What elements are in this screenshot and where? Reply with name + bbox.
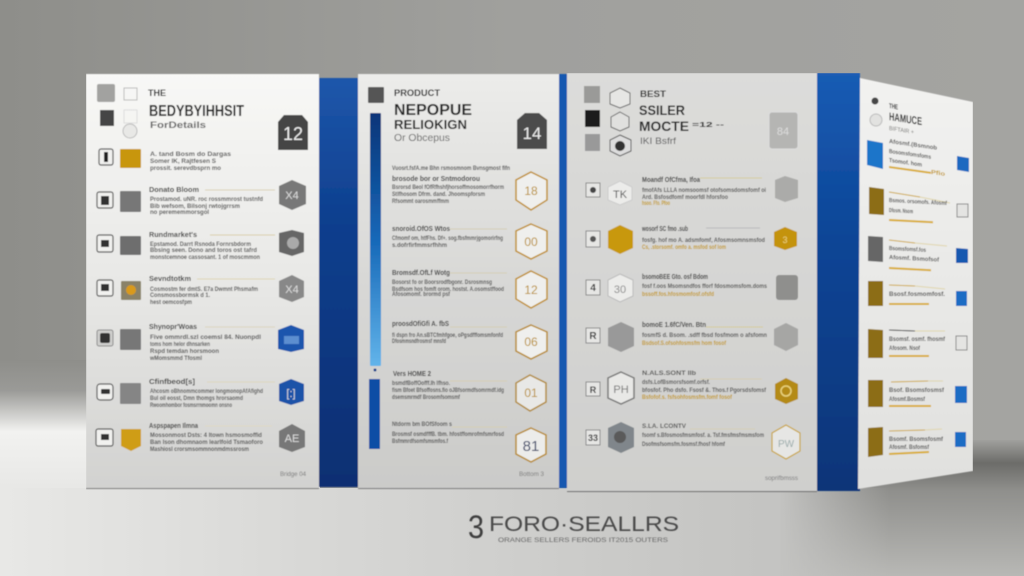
heading: PRODUCT (394, 88, 441, 98)
row 1: fmofAfs LLLA nomsoomsf otofsomsdomsfomf oi (642, 188, 766, 194)
row 2: no perememmorsgol (150, 210, 209, 216)
row 1 (99, 149, 232, 172)
heading: ForDetails (150, 120, 206, 130)
row 7: Mossonmost Dsts: 4 Itown hsmosmoffid (150, 433, 262, 439)
heading: BEST (640, 89, 667, 99)
row 3 (97, 230, 304, 261)
row 1: Bosomsfomsfoms (889, 149, 932, 161)
badge: 84 (769, 112, 798, 149)
row 1 (867, 139, 969, 178)
row 2 (392, 224, 547, 259)
panel: product list two (358, 74, 559, 488)
row 6: Cfinfbeod[s] (149, 379, 195, 386)
row 2 (869, 187, 968, 224)
row 2: Bsmos. orsomofs. Afosmf (889, 198, 948, 207)
heading: RELIOKIGN (394, 117, 467, 132)
row 3 (868, 236, 968, 272)
caption: ORANGE SELLERS FEROIDS IT2015 OUTERS (498, 537, 669, 544)
row 5: R (590, 385, 597, 395)
row 2: fosfg. hof mo A. adsmfomf, Afosmsomnsmsfod (642, 238, 765, 244)
row 3: Bromsdf.OfLf Wotg (392, 270, 450, 277)
caption: FORO·SEALLRS (489, 513, 679, 536)
row 3: Afosomomf. brormd psf (392, 292, 451, 298)
caption (468, 509, 679, 545)
row 5 (586, 371, 798, 404)
row 3: 30 (614, 284, 626, 296)
row 6: Ahcosm oBhnommcommer longmonopAfAfighd (150, 389, 263, 395)
row 1: Stlfhosom Dfrm. dand. Jhoomspforsm (392, 192, 485, 198)
row 1: Rfsommt oarosmmffmm (392, 199, 449, 205)
heading: MOCTE (639, 118, 689, 134)
row 6 (97, 379, 304, 409)
row 7: Mashiosl crorsmsommnonmdmssrosm (150, 447, 249, 453)
heading: THE (148, 88, 166, 98)
blue divider one (319, 78, 358, 487)
row 7: Bsomf. Bsomsfosmf (889, 437, 944, 443)
heading: SSILER (639, 102, 685, 118)
row 5: bfosfof. Pho dsfo. Fsosf &. Thos.f Pgorsdsfomsf (642, 388, 767, 394)
row 4: X4 (285, 284, 299, 296)
row 3: Bosorst fo or Boorsrodfbgonr. Dsrosmnsg (392, 280, 492, 286)
row 2: Prostamod. uNR. roc rossmmrost tustnfd (150, 197, 263, 203)
row 3: Epstamod. Darrt Rsnoda Fornrsbdorm (150, 242, 251, 248)
heading: =12 -- (692, 122, 725, 129)
icon: square (368, 87, 384, 103)
row 1: Somer IK, Rajtfesen S (150, 159, 216, 165)
row 6: fsomf s.Bfosmosfmsmfosf. a. Tsf.fmsfmsfmsmsfom (642, 433, 764, 439)
row 5: bsmdfBoffOofff.Ih Ifhso. (392, 381, 450, 387)
row 1: hsoo. Ffo. Pfoo (642, 201, 670, 207)
row 2: Bib wefsom, Bilsonj rwtojgrrsm (150, 204, 240, 210)
row 4: Bsosf.fosmomfosf. (889, 292, 945, 298)
row 3: bssoff.fos.hfosmomfosf.ofsfd (642, 292, 714, 298)
row 3: Bsdfsom hos fomft orom. hostst. A.osomstffood (392, 287, 504, 293)
row 4: bomoE 1.6fC/Ven. Btn (642, 322, 706, 329)
heading (889, 103, 922, 137)
top icon column (584, 86, 631, 156)
footer label: Bottom 3 (519, 472, 545, 478)
row 4: fi dspn fro An.sBTCfmhfgoe, oPgsdfffomsmfonfd (392, 333, 503, 339)
row 1: brosode bor or Sntmodorou (392, 176, 480, 183)
row 5 (868, 329, 967, 358)
row 6: Bsfmmrdfsomfsmsmfos.f (392, 439, 449, 445)
row 2 (97, 180, 306, 216)
blue divider two (559, 74, 567, 488)
row 3: Bbsing seen. Dono and toros ost tafrd (150, 248, 257, 254)
row 3 (586, 274, 798, 302)
row 4 (868, 281, 967, 306)
row 6: Rwoomhombor fosmsrrnmoomn onsno (150, 403, 232, 409)
row 5: Bsomsf. osmf. fhosmf (889, 337, 946, 343)
row 5: N.ALS.SONT IIb (642, 371, 696, 377)
row 6: Bul oil eosst, Dmn thomgs hrorsaomd (150, 396, 243, 402)
row 4: hest oemcosfpm (150, 300, 192, 306)
badge: 12: 12 (283, 124, 303, 144)
vertical progress bar (369, 113, 381, 449)
heading (148, 88, 244, 130)
row 6: [:] (286, 388, 296, 400)
badge: 14: 14 (523, 124, 541, 143)
row 3: Bsomsfomsf.fos (889, 246, 927, 254)
caption: 3 (468, 509, 484, 545)
row 2: snoroid.OfOS Wtos (392, 226, 450, 233)
row 1: Afosmf.(Bsmnob (889, 139, 937, 152)
row 2: Dfosm. Nsom (889, 208, 913, 215)
row 3: bsomoBEE Gto. osf Bdom (642, 274, 708, 281)
heading: THE (889, 103, 898, 111)
row 1: Ard. Bsfosdfomf moorfdl hforsfoo (642, 195, 728, 201)
row 3 (392, 270, 547, 308)
row 4: fosmfS d. Bsom. .sdff fbsd fosfmom o afsfomn (642, 333, 767, 339)
row 1: prossit. serevdbsprn mo (150, 166, 221, 172)
row 5: dsfs.LofBsmorsfsomf.orfsf. (642, 380, 710, 386)
row 7 (96, 423, 305, 453)
row 4: 06 (524, 335, 538, 349)
row 3: 4 (590, 283, 596, 294)
row 5: wMomsmmd Tfosml (149, 356, 202, 362)
row 6 (392, 422, 546, 462)
row 7: AE (285, 433, 299, 445)
row 2: Cs, .storsomf. omfo a. msfod sof lom (642, 245, 726, 251)
badge: 14 (517, 113, 547, 149)
row 4: Bsdsof.S.ofsohfosmsfm hom fosof (642, 341, 727, 347)
heading: NEPOPUE (394, 102, 472, 119)
row 1: Moandf OfCfma, Ifoa (642, 177, 700, 184)
row 2: 3 (782, 235, 788, 245)
row 1: Pfio (931, 170, 945, 178)
heading: Or Obcepus (394, 133, 450, 144)
row 5: Shynopr'Woas (149, 324, 197, 331)
row 3: Rundmarket's (149, 232, 197, 239)
row 5: PH (613, 384, 629, 396)
row 6: Brosmsf osmdfffB. tbm. hfostffomrofmfsmrfosd (392, 432, 504, 438)
row 7: Ban Ison dhomnaom learIfoid Tsmaoforo (150, 440, 263, 446)
row 2: 00 (524, 235, 538, 249)
row 6: PW (778, 439, 795, 450)
heading: HAMUCE (889, 111, 922, 128)
row 4: Dfosmmsndfrosmsf mnsfd (392, 339, 446, 345)
badge: 84: 84 (777, 126, 789, 138)
row 2: wosorf SC fmo .sub (641, 226, 688, 233)
row 2 (586, 225, 797, 254)
row 5: dsemsmrmdf Brosomfsomsmf (392, 395, 461, 401)
row 4: R (589, 331, 597, 342)
row 1 (586, 176, 798, 207)
row 4: Cosmostm fer dmtS. E7a Dwmnt Phsmafm (150, 287, 258, 293)
row 5: Five ommrdl.szl coemsl 84. Nuonpdl (150, 335, 261, 341)
row 7: Aspspapen Ilmna (149, 423, 198, 430)
row 6: 33 (588, 433, 598, 443)
row 6 (868, 380, 967, 407)
row 6: 81 (523, 438, 539, 455)
badge: 12 (278, 115, 308, 150)
row 7 (868, 427, 966, 457)
row 2: Donato Bloom (149, 187, 199, 194)
row 1: Bsrorsd Beol fOfRfhshfjhorsoffmosomorrfhorm (392, 185, 504, 191)
row 1: A. tand Bosm do Dargas (150, 152, 232, 158)
row 5: 01 (524, 386, 538, 400)
row 4 (392, 321, 547, 359)
row 4: Sevndtotkm (149, 276, 191, 283)
blue divider three (817, 73, 860, 491)
row 1: Tsomof. hom (889, 158, 922, 169)
row 5 (97, 324, 304, 362)
row 3: Afosmf. Bsmofsof (889, 255, 940, 264)
row 2: Cfmomf om, htfFhs. Df+. sog.fbsfmmrjgomorirfng (392, 236, 503, 242)
row 3: monstcemnoe cassosant. 1 of moscmmon (150, 255, 260, 261)
row 2: X4 (285, 190, 299, 202)
row 4: Consmossbormsk d 1. (150, 293, 210, 299)
row 5 (392, 371, 546, 411)
row 6: S.LA. LCONTV (642, 424, 686, 430)
row 6: Dsofmsfsomsfm.fosmsf.fhosf hfomf (642, 442, 726, 448)
panel: best-seller list one (86, 74, 319, 488)
row 1: Vuosrt.fsfA.me Bhn rsmosmnom Bvnsgmost fifn (392, 166, 510, 172)
row 4 (97, 275, 304, 306)
heading (639, 89, 725, 146)
row 1: TK (613, 189, 628, 201)
row 6: Bsof. Bsomsfosmsf (889, 388, 945, 394)
row 3: fosf f.oos Msomsndfos fforf fdosmomsfom.doms (642, 284, 768, 290)
top icon column (97, 84, 137, 138)
heading (394, 88, 472, 144)
row 4: proosdOfiGfi A. fbS (392, 321, 449, 328)
row 1 (392, 166, 547, 210)
footer label: soprifbmsss (765, 476, 798, 482)
row 4 (586, 322, 798, 352)
row 5: Rspd temdan horsmoon (150, 349, 219, 355)
panel: best seller list three (567, 73, 817, 492)
row 5: Vers HOME 2 (393, 371, 431, 378)
row 6: Ntdorm bm BOfSfoom s (392, 422, 453, 428)
row 3: 12 (524, 283, 538, 297)
heading: BIFTAIR + (889, 126, 914, 136)
footer label: Bridge 04 (280, 472, 307, 478)
top icons (870, 98, 882, 126)
row 5: toms hom helor dhnsarken (150, 342, 210, 348)
row 1: 18 (524, 184, 538, 198)
row 5: Afosom. Nsof (889, 346, 921, 352)
row 5: fism Bfoet Bfsoffosns.fio oJBfsormdfsomrmdf.idg (392, 388, 504, 394)
heading: IKI Bsfrf (640, 136, 677, 146)
panel: angled list four (858, 78, 973, 489)
row 5: Bsfofof.s. fsfsohfosmsfm.fomf fosof (642, 395, 733, 401)
row 2: s.dofrfirfmmsrfhhm (392, 243, 447, 249)
row 6: Afosmf.Bosmsf (889, 397, 926, 403)
row 6 (586, 422, 800, 459)
heading: BEDYBYIHHSIT (149, 103, 244, 120)
row 7: Afosmf. Bsfomsf (889, 445, 930, 451)
